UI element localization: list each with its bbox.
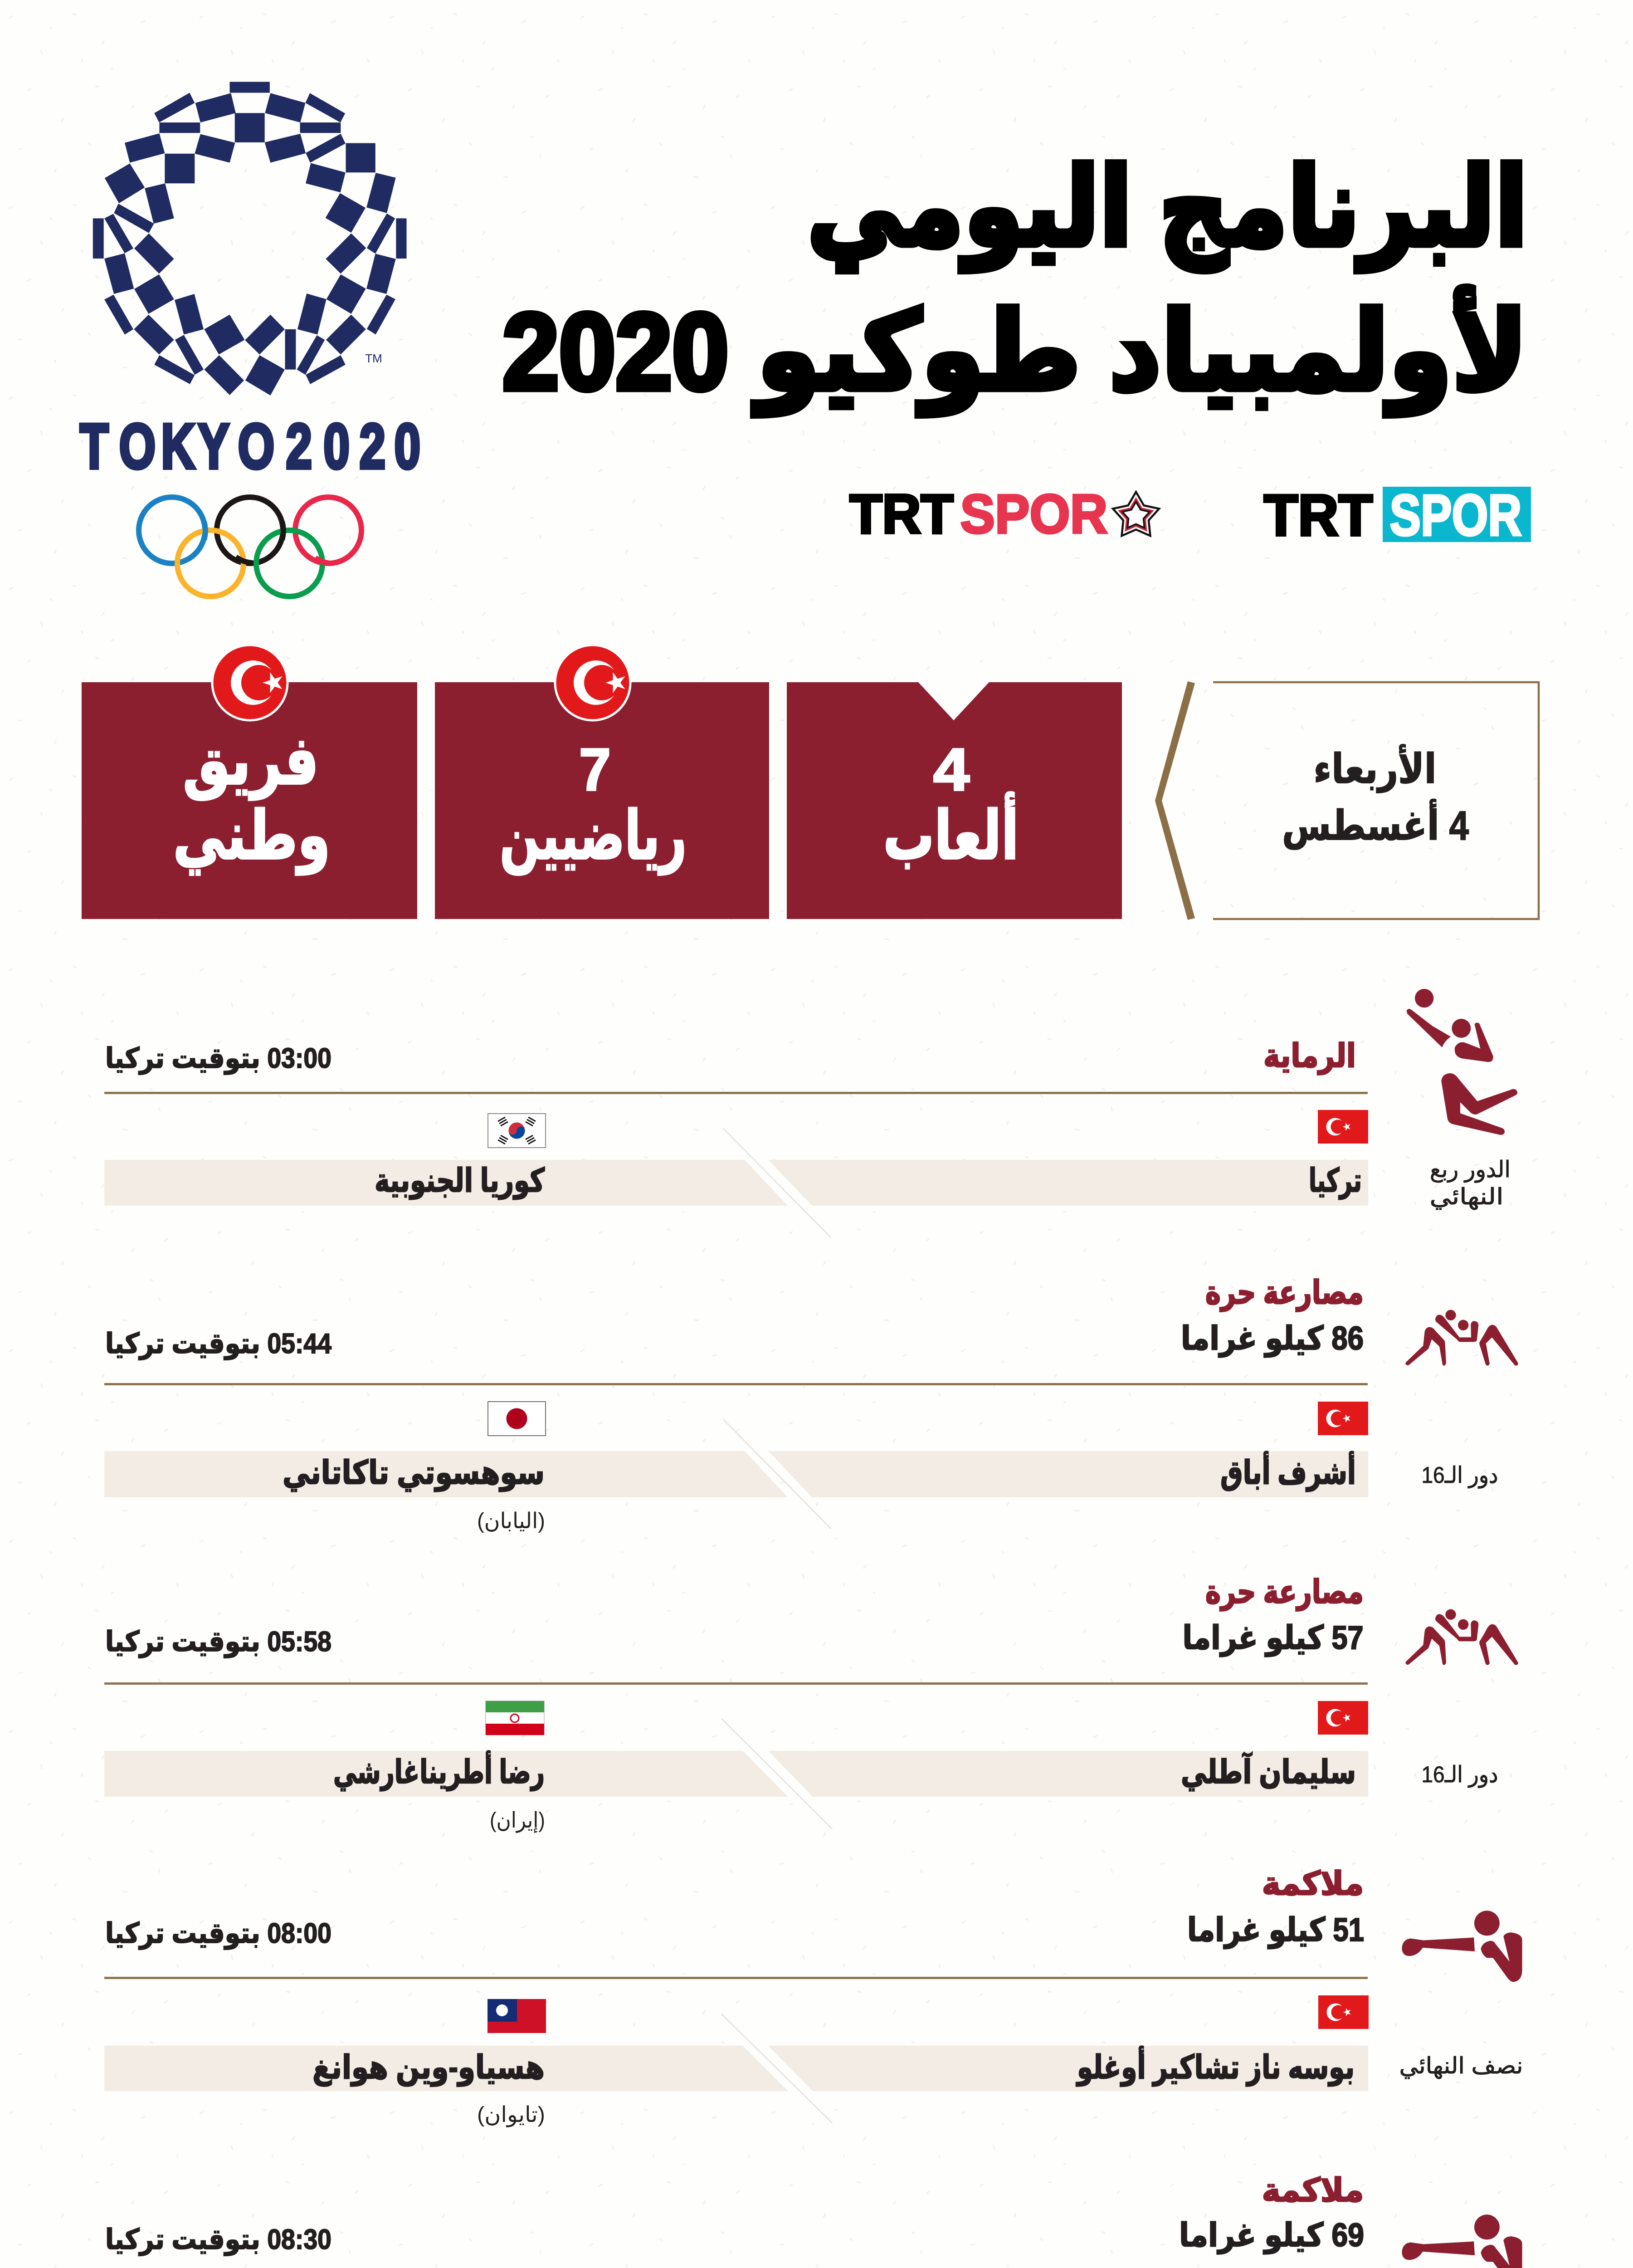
versus band [104,2014,1368,2123]
icon: Turkey badge, athletes [555,645,630,720]
flag: Japan [488,1402,546,1436]
stage label: نصف النهائي [1399,2053,1523,2079]
panel: national team [82,682,417,919]
title: البرنامج اليومي [807,147,1528,272]
panel: national team: وطني [173,798,330,875]
sport title: ملاكمة [1262,1866,1364,1902]
athlete: Turkey: سليمان آطلي [1181,1752,1356,1791]
versus band [104,1419,1368,1529]
flag: Turkey [1318,1701,1368,1735]
logo: TRT Spor Yildiz: TRT [850,483,953,545]
athlete: Turkey: بوسه ناز تشاكير أوغلو [1076,2046,1355,2087]
country note: (تايوان) [477,2103,545,2127]
flag: Turkey [1318,1402,1368,1435]
icon: boxing [1402,2214,1522,2268]
panel: wrestling 86 kg match [104,1275,1518,1533]
panel: national team: فريق [183,723,319,800]
icon: archery [1407,989,1517,1135]
icon: Turkey badge, team [212,645,288,720]
start time: 05:44 بتوقيت تركيا [105,1328,331,1360]
sport title: الرماية [1263,1038,1356,1075]
panel: 4 games: ألعاب [883,792,1019,873]
stage label: دور الـ16 [1421,1762,1498,1788]
versus band [104,1719,1368,1829]
panel: 7 athletes: 7 [579,736,611,803]
sport title: ملاكمة [1262,2172,1364,2209]
panel: 4 games: 4 [933,736,970,803]
logo: TRT Spor [1264,483,1531,548]
panel: date: الأربعاء [1313,744,1437,793]
flag: Turkey [1318,1110,1368,1144]
trademark: TM [365,352,382,365]
weight class: 57 كيلو غراما [1183,1620,1363,1657]
logo: TRT Spor Yildiz: SPOR [960,483,1107,545]
panel: date: 4 أغسطس [1282,799,1469,849]
panel: date [1155,681,1539,920]
athlete: Iran: رضا أطريناغارشي [333,1750,545,1791]
sport title: مصارعة حرة [1205,1275,1364,1312]
weight class: 51 كيلو غراما [1187,1912,1364,1949]
logo: TRT Spor: TRT [1264,483,1373,548]
flag: Iran [486,1701,544,1735]
icon: chequered wreath [93,82,407,396]
stage label: الدور ربع [1430,1157,1511,1183]
athlete: Taiwan: هسياو-وين هوانغ [312,2049,545,2087]
title [502,147,1528,416]
flag: Taiwan [487,1999,546,2033]
icon: Olympic rings [139,497,361,596]
athlete: South Korea: كوريا الجنوبية [375,1163,545,1200]
panel: archery match [104,989,1517,1237]
icon: wrestling [1405,1609,1518,1665]
start time: 05:58 بتوقيت تركيا [105,1626,331,1658]
flag: Turkey [1318,1995,1369,2029]
stage label: دور الـ16 [1421,1462,1498,1489]
start time: 08:00 بتوقيت تركيا [105,1918,331,1950]
athlete: Turkey: أشرف أباق [1220,1451,1356,1492]
start time: 08:30 بتوقيت تركيا [105,2224,331,2256]
panel: 7 athletes: رياضيين [500,798,687,875]
versus band [104,1128,1368,1237]
title: لأولمبياد طوكيو 2020 [502,287,1528,416]
start time: 03:00 بتوقيت تركيا [105,1043,331,1075]
panel: 7 athletes [435,682,769,919]
logo: TRT Spor Yildiz [850,483,1161,545]
icon: boxing [1402,1911,1522,1982]
panel: wrestling 57 kg match [104,1574,1518,1833]
flag: South Korea [488,1114,546,1148]
athlete: Turkey: تركيا [1309,1163,1362,1200]
weight class: 86 كيلو غراما [1181,1320,1364,1358]
weight class: 69 كيلو غراما [1179,2217,1364,2254]
wordmark: TOKYO 2020: TOKYO 2020 [80,411,420,482]
logo: Tokyo 2020 emblem [80,82,420,596]
panel: 4 games [787,682,1122,919]
logo: TRT Spor: SPOR [1389,483,1522,548]
panel: boxing 51 kg match [104,1866,1523,2127]
athlete: Japan: سوهسوتي تاكاتاني [283,1455,545,1492]
icon: wrestling [1405,1310,1518,1366]
panel: archery match: النهائي [1429,1184,1504,1210]
country note: (إيران) [490,1809,545,1833]
country note: (اليابان) [477,1509,545,1533]
panel: boxing 69 kg match [104,2172,1523,2268]
sport title: مصارعة حرة [1205,1574,1364,1611]
